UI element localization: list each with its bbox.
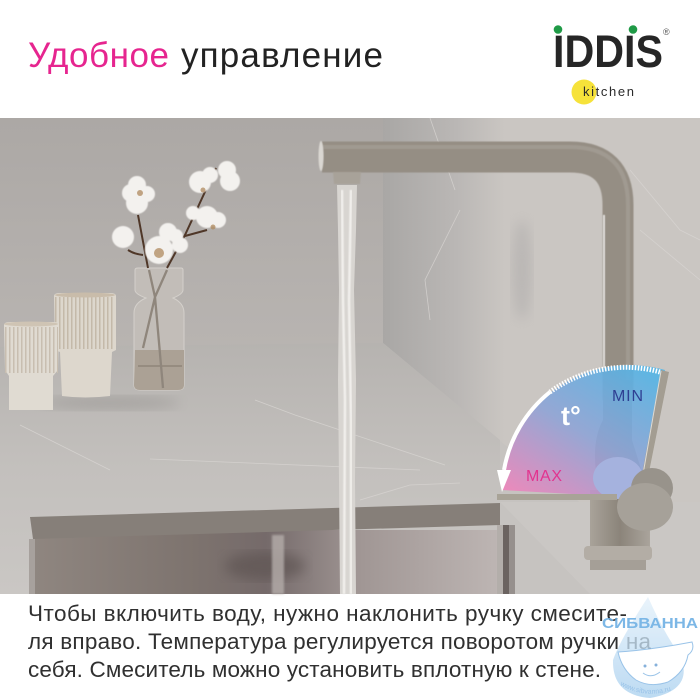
marble veins bbox=[20, 118, 700, 500]
water stream bbox=[337, 185, 357, 594]
watermark: sibvanna: СИБВАННА bbox=[602, 616, 699, 632]
watermark: sibvanna bbox=[602, 598, 699, 698]
title: Удобное bbox=[28, 36, 169, 75]
MIN label: MIN bbox=[612, 388, 643, 405]
cotton branches bbox=[112, 161, 240, 268]
description text bbox=[28, 601, 651, 682]
logo: IDDIS kitchen: kitchen bbox=[583, 84, 634, 99]
cup: large bbox=[54, 292, 116, 398]
collar bbox=[593, 457, 643, 499]
marble side wall bbox=[383, 118, 505, 445]
title bbox=[28, 36, 383, 75]
logo: IDDIS kitchen: ® bbox=[663, 27, 670, 37]
faucet spout and column bbox=[318, 141, 628, 400]
temperature fan bbox=[497, 365, 665, 497]
description text: ля вправо. Температура регулируется поворотом ручки на bbox=[28, 629, 651, 654]
right countertop bbox=[500, 502, 700, 594]
sink interior bbox=[33, 530, 498, 594]
right marble wall bbox=[505, 118, 700, 594]
back wall bbox=[0, 118, 384, 348]
cup shadow bbox=[40, 396, 180, 410]
cup: small bbox=[4, 322, 59, 410]
MAX label: MAX bbox=[526, 468, 562, 485]
countertop bbox=[0, 343, 500, 594]
description text: себя. Смеситель можно установить вплотную к стене. bbox=[28, 657, 601, 682]
sink left trim bbox=[29, 539, 35, 594]
arc arrow bbox=[497, 367, 660, 492]
counter edge bar bbox=[497, 494, 617, 500]
faucet neck behind overlay bbox=[595, 380, 642, 472]
t° label: t° bbox=[561, 401, 581, 431]
sink right trim bbox=[497, 525, 515, 594]
marble smudge bbox=[512, 220, 532, 320]
title: управление bbox=[181, 36, 383, 75]
logo: IDDIS kitchen bbox=[553, 25, 670, 105]
glass vase bbox=[134, 268, 184, 390]
watermark: sibvanna: www.sibvanna.ru bbox=[621, 682, 670, 694]
faucet base bbox=[584, 490, 652, 570]
logo: IDDIS kitchen: IDDIS bbox=[553, 26, 663, 77]
description text: Чтобы включить воду, нужно наклонить ручку смесите- bbox=[28, 601, 627, 626]
sink front edge bbox=[30, 503, 500, 539]
faucet handle bbox=[617, 370, 673, 531]
photo: kitchen scene bbox=[0, 118, 700, 594]
